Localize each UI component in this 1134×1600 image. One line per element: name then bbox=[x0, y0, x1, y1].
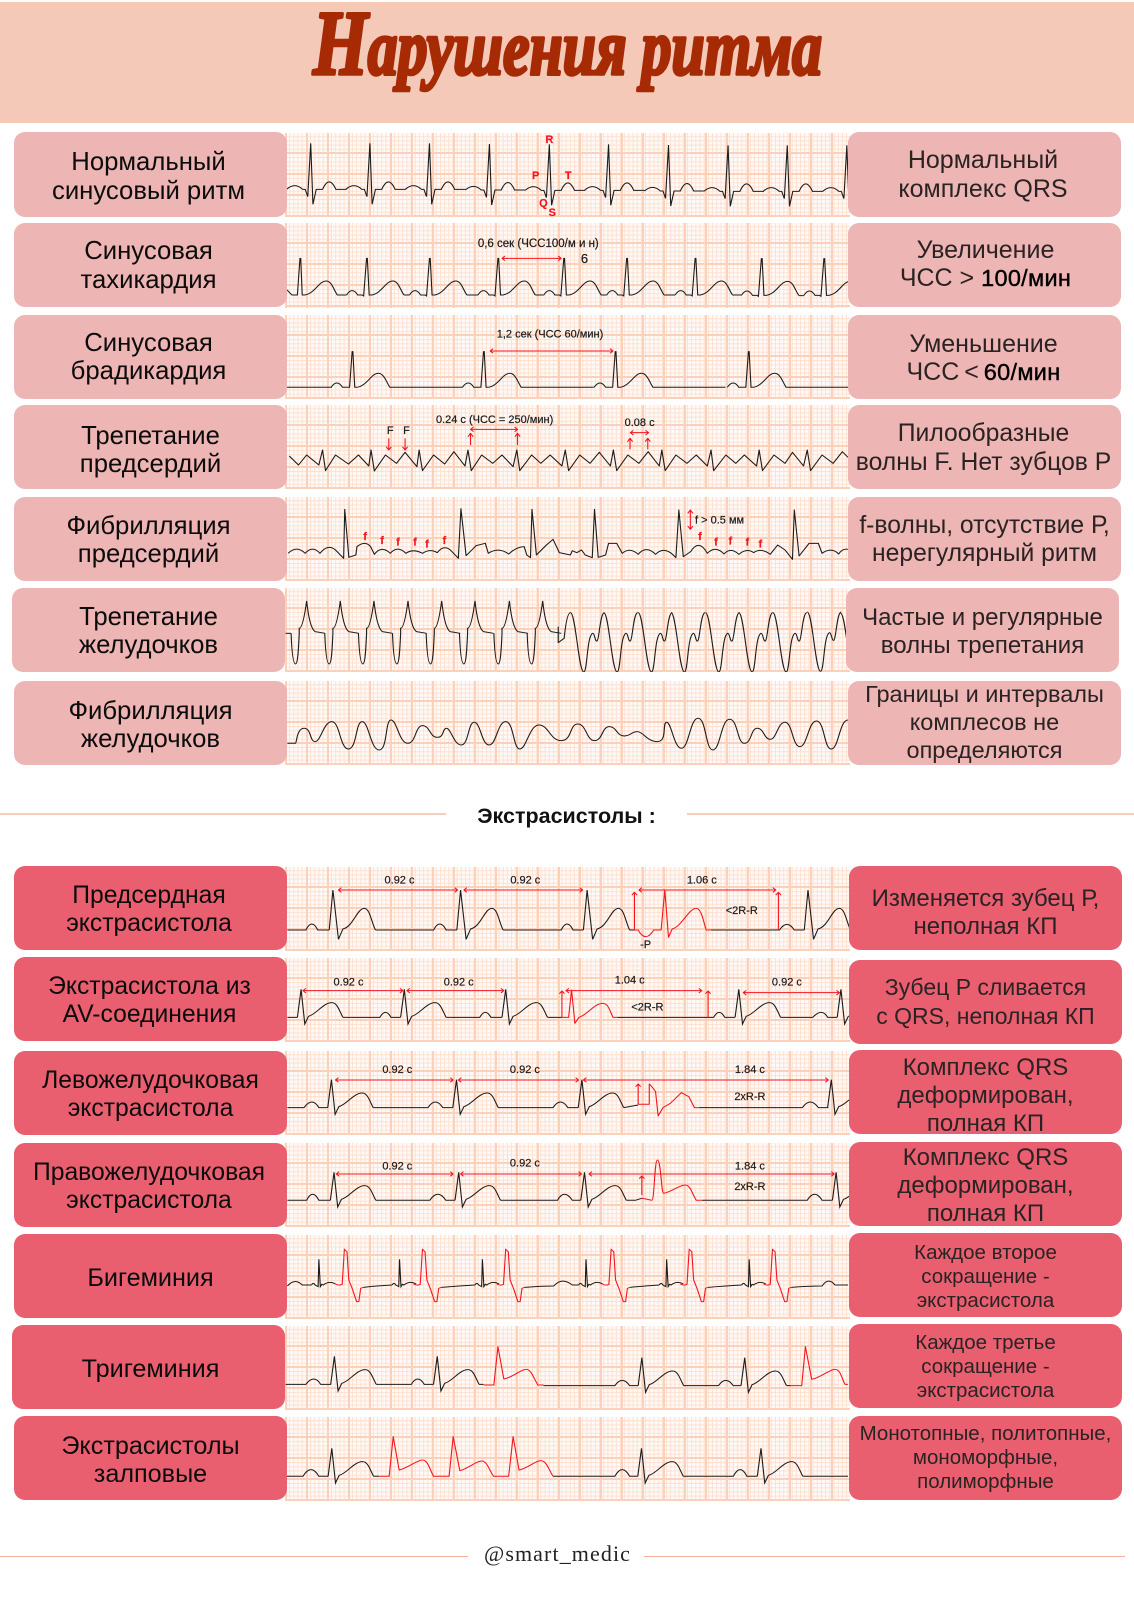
description: increased heart rate: ЧСС > 100/мин bbox=[900, 264, 1071, 292]
section heading: Экстрасистолы : bbox=[477, 804, 656, 828]
ECG trace bbox=[286, 1448, 848, 1483]
ECG trace bbox=[289, 450, 848, 471]
section divider left bbox=[0, 813, 446, 815]
interval labels: 2xR-R bbox=[734, 1181, 766, 1193]
description: P wave changes: неполная КП bbox=[914, 913, 1057, 940]
label: sinus tachycardia bbox=[14, 223, 287, 307]
label: atrial extrasystole: Предсердная bbox=[72, 882, 226, 909]
interval label: 1,2 сек (ЧСС 60/мин) bbox=[497, 328, 603, 340]
f wave labels: f bbox=[363, 531, 367, 543]
interval labels: 0.92 с bbox=[772, 976, 802, 988]
label: trigeminy bbox=[12, 1325, 285, 1409]
description: every second beat: Каждое второе bbox=[914, 1241, 1057, 1264]
label: sinus bradycardia: брадикардия bbox=[71, 357, 226, 385]
ECG chart: normal sinus rhythm bbox=[285, 133, 850, 217]
label: ventricular flutter: Трепетание bbox=[79, 602, 218, 630]
description: f waves bbox=[848, 497, 1121, 581]
ECG chart: ventricular fibrillation bbox=[285, 681, 850, 765]
f wave labels: f bbox=[396, 537, 400, 549]
description: complexes undefined: комплесов не bbox=[910, 709, 1059, 735]
amplitude arrow bbox=[688, 510, 693, 529]
f wave labels: f bbox=[758, 538, 762, 550]
title banner bbox=[0, 2, 1134, 123]
description: P wave changes bbox=[849, 866, 1122, 950]
ECG chart: AV-junction extrasystole bbox=[285, 958, 850, 1042]
section divider right bbox=[687, 813, 1134, 815]
description: sawtooth waves: волны F. Нет зубцов Р bbox=[856, 448, 1111, 476]
interval labels: 0.92 с bbox=[510, 1158, 540, 1170]
label: left ventricular extrasystole bbox=[14, 1051, 287, 1135]
description: every second beat: сокращение - bbox=[921, 1265, 1050, 1288]
description: f waves: f-волны, отсутствие Р, bbox=[859, 512, 1110, 539]
ECG trace bbox=[287, 1259, 848, 1287]
description: P merges with QRS: Зубец Р сливается bbox=[885, 974, 1086, 1000]
label: atrial flutter bbox=[14, 405, 287, 489]
footer divider right bbox=[644, 1556, 1125, 1557]
ECG chart: left ventricular extrasystole bbox=[285, 1051, 850, 1135]
label: sinus tachycardia: Синусовая bbox=[84, 237, 213, 265]
description: decreased heart rate: Уменьшение bbox=[909, 330, 1058, 358]
label: ventricular fibrillation: Фибрилляция bbox=[68, 696, 233, 724]
label: salvo extrasystoles: залповые bbox=[94, 1460, 207, 1488]
f wave labels: f bbox=[425, 538, 429, 550]
description: P wave changes: Изменяется зубец Р, bbox=[872, 885, 1099, 912]
interval labels: <2R-R bbox=[631, 1002, 664, 1014]
interval labels: 1.84 с bbox=[735, 1160, 765, 1172]
footer divider left bbox=[0, 1556, 468, 1557]
interval labels: 0.92 с bbox=[510, 1064, 540, 1076]
interval arrow bbox=[490, 349, 613, 353]
description: complexes undefined: определяются bbox=[907, 737, 1062, 763]
ECG chart: sinus tachycardia bbox=[285, 223, 850, 308]
f wave labels: f > 0.5 мм bbox=[695, 514, 744, 526]
label: sinus bradycardia: Синусовая bbox=[84, 328, 213, 356]
description: deformed QRS left bbox=[849, 1050, 1122, 1134]
interval labels: <2R-R bbox=[726, 905, 758, 917]
label: right ventricular extrasystole: Правожелудочковая bbox=[33, 1159, 265, 1186]
annotation labels: 0.24 с (ЧСС = 250/мин) bbox=[436, 414, 553, 426]
interval labels: 2xR-R bbox=[734, 1091, 766, 1103]
description: regular flutter waves: волны трепетания bbox=[881, 632, 1084, 659]
description: salvo types bbox=[849, 1416, 1122, 1500]
footer handle: @smart_medic bbox=[484, 1541, 631, 1566]
extrasystoles bbox=[484, 1347, 848, 1386]
interval label: 6 bbox=[581, 251, 588, 266]
interval label: 0,6 сек (ЧСС100/м и н) bbox=[478, 238, 599, 250]
label: right ventricular extrasystole: экстрасистола bbox=[66, 1187, 232, 1214]
label: ventricular flutter bbox=[12, 588, 285, 672]
extrasystole and interval arrows bbox=[336, 1160, 834, 1200]
label: normal sinus rhythm: синусовый ритм bbox=[52, 176, 245, 204]
ECG chart: sinus bradycardia bbox=[285, 315, 850, 399]
interval labels: -P bbox=[640, 939, 651, 951]
wave labels bbox=[532, 134, 572, 219]
ECG trace bbox=[286, 601, 875, 673]
label: trigeminy: Тригеминия bbox=[82, 1355, 219, 1383]
ECG chart: ventricular flutter bbox=[285, 588, 850, 672]
interval labels: 0.92 с bbox=[510, 874, 541, 886]
ECG trace bbox=[287, 258, 861, 296]
label: sinus tachycardia: тахикардия bbox=[80, 266, 216, 294]
f wave labels: f bbox=[745, 537, 749, 549]
ECG chart: atrial extrasystole bbox=[285, 867, 850, 951]
description: P merges with QRS: с QRS, неполная КП bbox=[876, 1002, 1095, 1028]
label: salvo extrasystoles: Экстрасистолы bbox=[61, 1432, 240, 1460]
ECG chart: atrial fibrillation bbox=[285, 497, 850, 581]
ECG chart: right ventricular extrasystole bbox=[285, 1143, 850, 1227]
annotation labels: F bbox=[387, 425, 394, 437]
description: decreased heart rate bbox=[848, 315, 1121, 399]
label: AV junction extrasystole bbox=[14, 957, 287, 1041]
label: ventricular flutter: желудочков bbox=[79, 631, 218, 659]
ECG trace bbox=[287, 143, 883, 206]
wave labels: P bbox=[532, 170, 539, 182]
label: atrial extrasystole: экстрасистола bbox=[66, 910, 232, 937]
description: sawtooth waves: Пилообразные bbox=[898, 420, 1069, 447]
label: bigeminy bbox=[14, 1234, 287, 1318]
wave labels: R bbox=[545, 134, 553, 146]
ECG trace bbox=[287, 989, 883, 1024]
description: f waves: нерегулярный ритм bbox=[872, 540, 1097, 567]
label: left ventricular extrasystole: экстрасистола bbox=[68, 1095, 233, 1122]
interval labels: 0.92 с bbox=[444, 976, 474, 988]
description: normal QRS bbox=[848, 132, 1121, 217]
f wave labels: f bbox=[698, 531, 702, 543]
label: AV junction extrasystole: AV-соединения bbox=[63, 1001, 236, 1028]
ECG trace bbox=[288, 509, 848, 559]
description: sawtooth waves bbox=[848, 405, 1121, 489]
description: salvo types: полиморфные bbox=[917, 1470, 1054, 1493]
description: salvo types: Монотопные, политопные, bbox=[860, 1422, 1111, 1445]
ECG chart: trigeminy bbox=[285, 1326, 850, 1410]
interval labels: 0.92 с bbox=[334, 976, 364, 988]
wave labels: Q bbox=[539, 198, 548, 210]
label: normal sinus rhythm bbox=[14, 132, 287, 217]
description: normal QRS: комплекс QRS bbox=[898, 174, 1068, 202]
description: every second beat: экстрасистола bbox=[917, 1289, 1054, 1312]
ECG trace bbox=[287, 1172, 878, 1207]
label: ventricular fibrillation bbox=[14, 681, 287, 765]
ECG chart: atrial flutter bbox=[285, 405, 850, 489]
ECG trace bbox=[287, 718, 848, 750]
description: every third beat: экстрасистола bbox=[917, 1379, 1054, 1402]
label: left ventricular extrasystole: Левожелудочковая bbox=[42, 1067, 259, 1094]
description: complexes undefined: Границы и интервалы bbox=[865, 681, 1104, 707]
description: complexes undefined bbox=[848, 681, 1121, 765]
interval label bbox=[478, 238, 599, 266]
label: bigeminy: Бигеминия bbox=[87, 1264, 214, 1292]
description: decreased heart rate: ЧСС < 60/мин bbox=[906, 358, 1060, 386]
description: salvo types: мономорфные, bbox=[913, 1446, 1058, 1469]
wave labels: T bbox=[565, 170, 572, 182]
ECG trace bbox=[287, 352, 859, 387]
description: every third beat: сокращение - bbox=[921, 1355, 1050, 1378]
description: regular flutter waves: Частые и регулярные bbox=[862, 604, 1103, 631]
interval labels bbox=[382, 1064, 766, 1103]
extrasystole and interval arrows bbox=[303, 988, 839, 1023]
label: atrial flutter: Трепетание bbox=[81, 422, 220, 450]
description: deformed QRS right: Комплекс QRS bbox=[903, 1144, 1068, 1171]
description: deformed QRS right: полная КП bbox=[927, 1200, 1044, 1227]
description: deformed QRS left: деформирован, bbox=[897, 1082, 1074, 1109]
extrasystoles bbox=[379, 1437, 553, 1476]
f wave labels bbox=[363, 514, 762, 550]
f wave labels: f bbox=[413, 537, 417, 549]
f wave labels: f bbox=[380, 535, 384, 547]
description: P merges with QRS bbox=[849, 960, 1122, 1044]
f wave labels: f bbox=[714, 537, 718, 549]
interval labels bbox=[334, 974, 802, 1014]
description: regular flutter waves bbox=[846, 588, 1119, 672]
annotation labels bbox=[387, 414, 655, 437]
label: AV junction extrasystole: Экстрасистола из bbox=[48, 973, 251, 1000]
label: atrial fibrillation bbox=[14, 497, 287, 581]
label: salvo extrasystoles bbox=[14, 1416, 287, 1500]
ECG chart: salvo extrasystoles bbox=[285, 1417, 850, 1501]
interval labels: 0.92 с bbox=[382, 1160, 413, 1172]
description: deformed QRS left: Комплекс QRS bbox=[903, 1054, 1068, 1081]
label: ventricular fibrillation: желудочков bbox=[81, 725, 220, 753]
interval labels: 1.06 с bbox=[687, 874, 717, 886]
extrasystoles bbox=[336, 1249, 791, 1302]
ECG chart: bigeminy bbox=[285, 1235, 850, 1319]
annotation labels: F bbox=[403, 425, 410, 437]
interval labels bbox=[385, 874, 758, 951]
ECG trace bbox=[287, 890, 851, 939]
interval labels: 1.84 с bbox=[735, 1064, 765, 1076]
description: increased heart rate bbox=[848, 223, 1121, 307]
extrasystole and interval arrows bbox=[338, 888, 781, 937]
ECG trace bbox=[287, 1080, 873, 1114]
f wave labels: f bbox=[442, 535, 446, 547]
label: sinus bradycardia bbox=[14, 315, 287, 399]
description: increased heart rate: Увеличение bbox=[917, 236, 1054, 264]
label: right ventricular extrasystole bbox=[14, 1143, 287, 1227]
interval labels: 0.92 с bbox=[382, 1064, 413, 1076]
interval labels bbox=[382, 1158, 766, 1193]
ECG trace bbox=[286, 1356, 791, 1392]
label: atrial flutter: предсердий bbox=[80, 450, 221, 478]
label: atrial fibrillation: Фибрилляция bbox=[66, 512, 231, 540]
description: normal QRS: Нормальный bbox=[908, 146, 1058, 174]
description: deformed QRS left: полная КП bbox=[927, 1110, 1044, 1137]
description: deformed QRS right bbox=[849, 1142, 1122, 1226]
label: atrial fibrillation: предсердий bbox=[78, 540, 219, 568]
f wave labels: f bbox=[728, 536, 732, 548]
description: every second beat bbox=[849, 1233, 1122, 1317]
label: atrial extrasystole bbox=[14, 866, 287, 950]
description: deformed QRS right: деформирован, bbox=[897, 1172, 1074, 1199]
interval labels: 1.04 с bbox=[615, 974, 645, 986]
description: every third beat: Каждое третье bbox=[915, 1331, 1056, 1354]
label: normal sinus rhythm: Нормальный bbox=[71, 148, 226, 176]
extrasystole and interval arrows bbox=[336, 1078, 828, 1116]
interval labels: 0.92 с bbox=[385, 874, 415, 886]
annotation arrows bbox=[386, 427, 650, 450]
annotation labels: 0.08 с bbox=[625, 417, 655, 429]
interval arrow bbox=[502, 256, 561, 261]
description: every third beat bbox=[849, 1324, 1122, 1408]
